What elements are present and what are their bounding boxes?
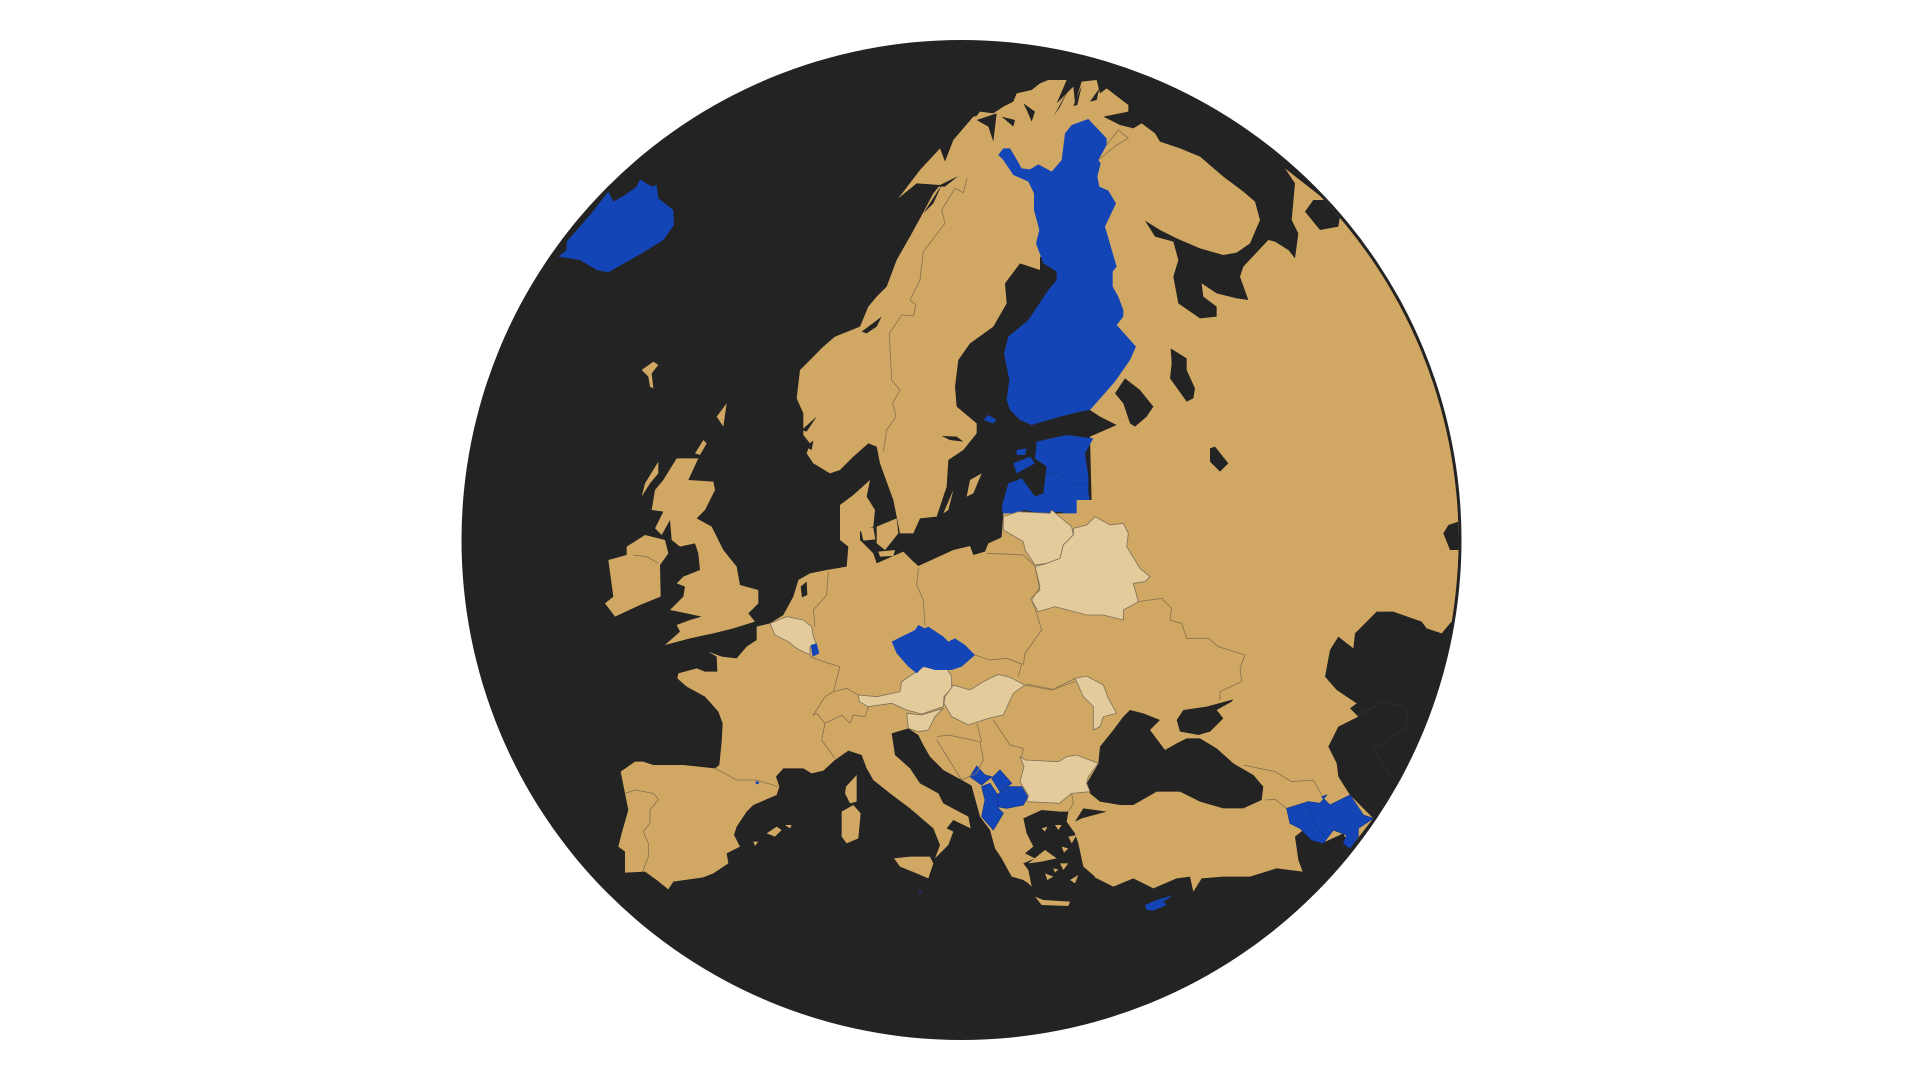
central European countries and borders: [625, 553, 1075, 892]
Trondheim fjord: [862, 317, 882, 333]
land: Corsica: [845, 775, 857, 803]
land: Menorca: [785, 825, 792, 828]
Norwegian fjords: [803, 176, 958, 450]
countries: Armenia and Azerbaijan: [1287, 795, 1373, 848]
land: Gotland: [967, 473, 982, 497]
country: Moldova: [1075, 676, 1117, 730]
borders: western and central Europe: [625, 553, 1075, 872]
land: Mallorca: [767, 827, 782, 837]
border: Armenia: [1307, 805, 1325, 837]
Aland Islands: [983, 415, 997, 423]
land: Funen: [861, 527, 875, 541]
country: Belarus: [1031, 517, 1150, 620]
Cheshskaya Bay: [1305, 200, 1340, 230]
land: Great Britain: [652, 458, 758, 645]
globe disc: [462, 40, 1462, 1040]
land: Shetland: [717, 403, 727, 427]
country: Estonia and Latvia: [1002, 435, 1094, 516]
border: Norway and Sweden: [883, 178, 968, 452]
country: Belgium: [770, 617, 817, 655]
country: Bulgaria: [1020, 755, 1098, 803]
country: Hungary: [944, 674, 1025, 725]
country: Andorra: [756, 781, 759, 784]
border: Norway and Russia: [1098, 130, 1128, 160]
lake: Onega: [1170, 348, 1195, 402]
Sea of Azov: [1177, 699, 1233, 735]
country: Malta: [918, 890, 922, 892]
lake: Vanern: [942, 436, 963, 442]
country: Luxembourg: [811, 643, 819, 657]
Aegean Sea: [1023, 810, 1095, 900]
Sea of Marmara: [1075, 808, 1107, 822]
land: eastern Europe, Russia south, Turkey, Greece: [960, 500, 1460, 911]
land: Ireland: [605, 535, 668, 617]
land: northern Russia and Kola: [960, 80, 1493, 570]
land: Scandinavia and Atlantic islands: [558, 90, 1040, 533]
Finnmark fjords: [977, 86, 1099, 142]
land: Sicily: [894, 857, 933, 878]
land: Faroe Islands: [642, 362, 658, 388]
lake: Rybinsk: [1210, 447, 1228, 472]
country: North Macedonia: [997, 787, 1028, 808]
map land layers: [558, 80, 1493, 911]
country: Montenegro: [970, 766, 992, 785]
land: Ibiza: [753, 842, 758, 846]
land: Orkney: [695, 440, 707, 455]
country: Cyprus: [1145, 895, 1173, 911]
IJsselmeer: [801, 582, 807, 597]
border: Estonia and Latvia: [1047, 472, 1087, 485]
Black Sea: [1087, 710, 1263, 808]
faint borders in the dark region east of the Caspian: [1358, 702, 1407, 777]
dark inlet on the eastern map edge: [1443, 522, 1460, 550]
Saaremaa: [1013, 457, 1035, 473]
Crete: [1035, 897, 1070, 906]
lake: Ladoga: [1115, 378, 1153, 427]
Hiiumaa: [1017, 448, 1027, 455]
land: Lolland: [878, 550, 895, 557]
country: Lithuania: [1003, 510, 1073, 565]
country: Kosovo: [992, 770, 1012, 792]
country: Albania: [982, 783, 1003, 830]
land: Oland: [943, 490, 953, 513]
borders: Ukraine, Georgia, Turkey, Romania: [1027, 598, 1322, 812]
land: Sardinia: [842, 805, 861, 843]
country: Austria: [858, 667, 952, 714]
country: Czechia: [892, 625, 975, 673]
land: Hebrides: [642, 462, 658, 497]
country: Iceland: [558, 179, 674, 272]
country: Slovenia: [907, 708, 943, 732]
land: Zealand: [877, 518, 898, 550]
land: western and central Europe: [605, 458, 1001, 890]
map of Europe on a dark globe: [462, 40, 1462, 1040]
country: Finland: [998, 119, 1136, 425]
Aegean islands: [1028, 825, 1078, 883]
